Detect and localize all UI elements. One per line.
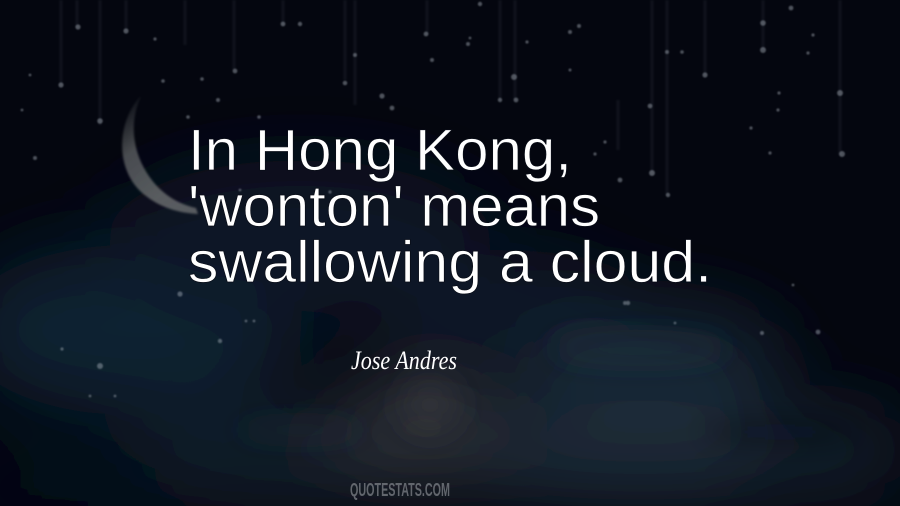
quote text: swallowing a cloud. xyxy=(188,230,712,295)
scattered stars xyxy=(21,2,845,397)
icon: crescent moon xyxy=(122,96,198,214)
quote text xyxy=(188,118,712,295)
quote text: 'wonton' means xyxy=(188,174,600,239)
quote text: In Hong Kong, xyxy=(188,118,572,183)
falling star streaks xyxy=(61,0,840,195)
watermark: QUOTESTATS.COM xyxy=(350,480,450,500)
author signature: Jose Andres xyxy=(351,346,457,375)
